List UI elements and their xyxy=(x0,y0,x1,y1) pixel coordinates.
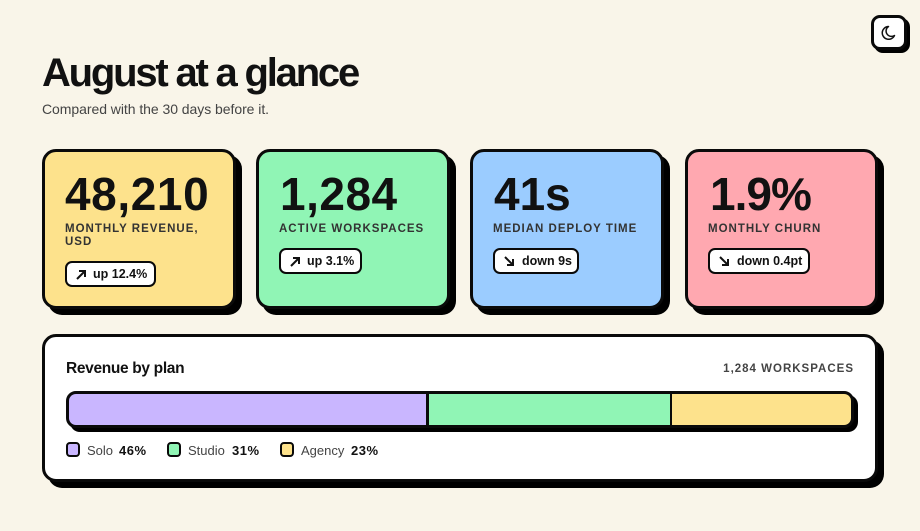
legend swatch: studio xyxy=(167,442,181,457)
label: ACTIVE WORKSPACES xyxy=(279,223,424,235)
legend: solo: Solo xyxy=(87,443,113,458)
heading: revenue by plan: Revenue by plan xyxy=(66,360,184,377)
delta badge xyxy=(279,248,362,274)
delta badge xyxy=(708,248,810,274)
subtitle: Compared with the 30 days before it. xyxy=(42,101,269,117)
panel: active workspaces xyxy=(256,149,450,309)
value: 48,210 xyxy=(65,168,209,220)
label: MONTHLY CHURN xyxy=(708,223,821,235)
theme toggle: moon icon xyxy=(871,15,907,50)
legend: studio: Studio xyxy=(188,443,225,458)
legend: agency xyxy=(301,443,379,458)
workspace count: 1,284 WORKSPACES xyxy=(723,363,854,375)
delta badge xyxy=(65,261,156,287)
value: 41s xyxy=(494,168,571,220)
segment: solo 46% xyxy=(69,394,426,425)
panel: median deploy time xyxy=(470,149,664,309)
label xyxy=(65,223,199,248)
delta badge xyxy=(493,248,579,274)
legend: agency: Agency xyxy=(301,443,344,458)
panel: revenue by plan xyxy=(42,334,878,482)
legend swatch: agency xyxy=(280,442,294,457)
value: 1,284 xyxy=(280,168,398,220)
legend: studio xyxy=(188,443,260,458)
delta badge: down 9s xyxy=(522,254,572,268)
legend: agency: 23% xyxy=(351,443,379,458)
legend: solo: 46% xyxy=(119,443,147,458)
delta badge: down 0.4pt xyxy=(737,254,802,268)
value: 1.9% xyxy=(710,168,811,220)
title: August at a glance xyxy=(42,51,358,95)
panel: monthly churn xyxy=(685,149,878,309)
stacked bar chart xyxy=(66,391,854,428)
legend swatch: solo xyxy=(66,442,80,457)
panel: monthly revenue xyxy=(42,149,236,309)
legend: solo xyxy=(87,443,147,458)
segment: studio 31% xyxy=(429,394,670,425)
label: USD xyxy=(65,236,92,248)
segment: agency 23% xyxy=(672,394,851,425)
label: MONTHLY REVENUE, xyxy=(65,223,199,235)
delta badge: up 12.4% xyxy=(93,267,147,281)
label: MEDIAN DEPLOY TIME xyxy=(493,223,637,235)
delta badge: up 3.1% xyxy=(307,254,354,268)
legend: studio: 31% xyxy=(232,443,260,458)
